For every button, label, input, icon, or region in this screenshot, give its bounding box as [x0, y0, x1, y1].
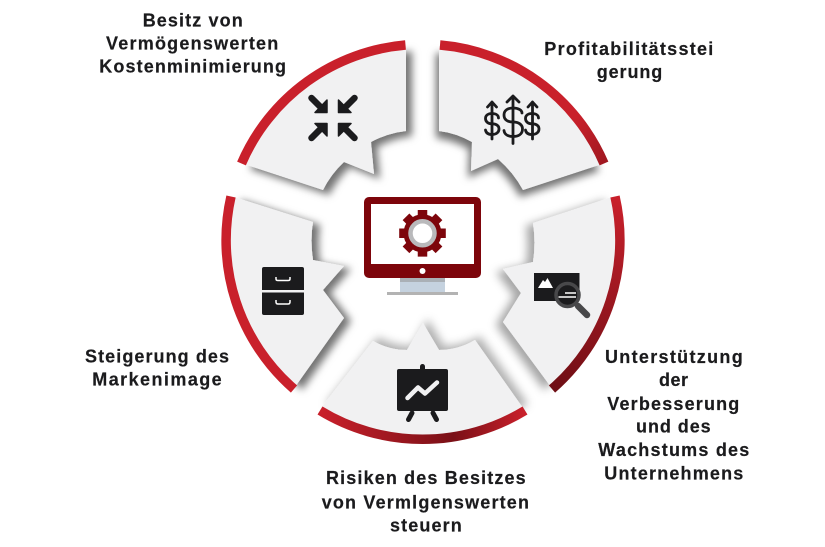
board [397, 369, 448, 411]
text: left label: Markenimage [92, 370, 222, 390]
image card [534, 273, 580, 301]
text: right label: Unterstützung [605, 347, 743, 367]
magnifier handle [578, 306, 587, 315]
magnifier lens [556, 284, 579, 306]
trend line [408, 382, 437, 398]
text: bottom label: steuern [390, 516, 462, 536]
text: bottom label: Risiken des Besitzes [326, 468, 526, 488]
text: right label: Wachstums des [598, 440, 749, 460]
mountains [538, 278, 553, 288]
monitor stand [400, 278, 445, 292]
text: top right label: Profitabilitätsstei [544, 39, 713, 59]
icon: presentation board [397, 366, 448, 420]
lens lines [558, 293, 576, 297]
power button [420, 268, 426, 274]
red arc [242, 45, 406, 164]
text: right label: Verbesserung [607, 394, 739, 414]
panel shape [321, 323, 523, 436]
red arc [552, 196, 620, 389]
panel shape [439, 46, 602, 190]
text: top right label [544, 39, 713, 82]
gear hub [410, 221, 434, 245]
handles [276, 277, 290, 304]
icon: arrows pointing inward [312, 98, 354, 138]
text: right label: der [659, 370, 688, 390]
text: top left label: Vermögenswerten [106, 33, 278, 53]
monitor base [387, 292, 458, 295]
legs [408, 413, 436, 420]
board top knob [420, 366, 425, 371]
text: right label: Unternehmens [604, 463, 743, 483]
icon: monitor with gear [364, 197, 481, 295]
text: left label: Steigerung des [85, 347, 229, 367]
gear [399, 210, 446, 257]
panel shape [229, 197, 344, 387]
top drawer [262, 267, 304, 290]
panel shape [503, 197, 617, 387]
panel: left segment [226, 196, 344, 389]
text: bottom label: von Vermlgenswerten [322, 492, 529, 512]
panel: right segment [503, 196, 620, 389]
text: right label [598, 347, 749, 483]
text: top left label: Kostenminimierung [99, 56, 286, 76]
bottom drawer [262, 292, 304, 315]
text: left label [85, 347, 229, 390]
red arc [226, 196, 294, 389]
panel: top left segment [242, 45, 406, 190]
icon: image with magnifier [534, 273, 587, 315]
text: top left label [99, 10, 286, 76]
red arc [320, 410, 525, 439]
red arc [440, 45, 604, 164]
text: bottom label [322, 468, 529, 536]
monitor body [364, 197, 481, 278]
text: top left label: Besitz von [143, 10, 243, 30]
text: right label: und des [636, 417, 711, 437]
icon: dollar signs with up arrows [486, 96, 539, 144]
panel: top right segment [439, 45, 604, 190]
text: top right label: gerung [597, 62, 662, 82]
monitor screen [371, 204, 474, 264]
panel: bottom segment [320, 323, 525, 439]
icon: filing cabinet [262, 267, 304, 315]
panel shape [244, 46, 406, 190]
